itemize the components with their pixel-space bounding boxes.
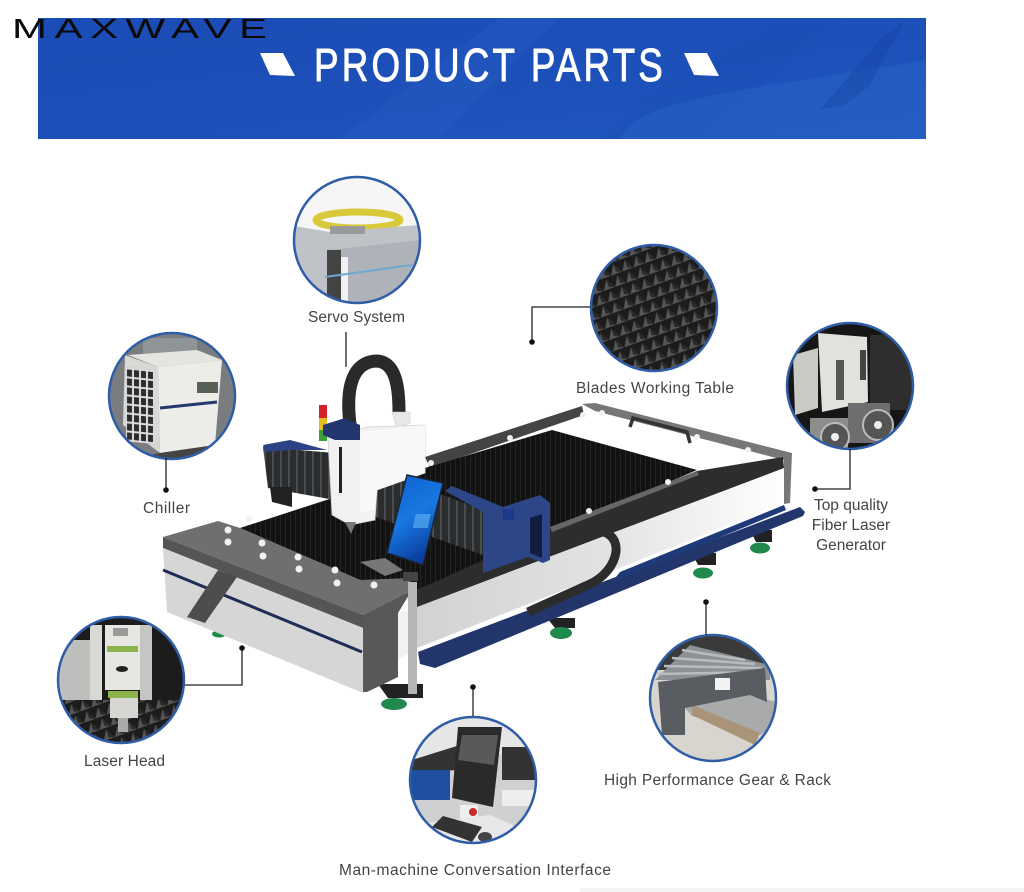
logo: MAXWAVE [12,13,267,44]
callout: fiber laser generator [787,323,915,554]
label: Servo System [308,309,405,326]
cutting bed [240,430,697,590]
label [812,497,890,554]
callout: gear and rack [604,599,831,789]
label: Fiber Laser [812,517,890,534]
gantry blue end [445,486,550,573]
callout: laser head [58,617,245,770]
label: Laser Head [84,753,165,770]
front end top [163,521,412,615]
signal light [319,405,327,441]
blades photo [591,245,717,371]
label: High Performance Gear & Rack [604,772,831,789]
bottom edge shade [580,888,1024,892]
label: Chiller [143,500,190,517]
gear photo [650,635,776,761]
laser cutting machine [163,361,805,710]
callout: chiller [109,333,235,517]
cutting head [323,412,425,534]
front face [163,548,363,693]
rear bed and frame [425,403,792,504]
leader [163,458,169,493]
label: Man-machine Conversation Interface [339,862,611,879]
control post [360,558,418,694]
mounting bumps [224,410,751,588]
gantry right bellows [370,476,483,555]
machine feet [212,530,772,710]
side toothed band [417,457,784,607]
laser head photo [58,617,184,743]
gantry left bellows [263,440,335,507]
drag chain [349,361,399,424]
leader [185,645,245,685]
chiller photo [109,333,235,459]
generator photo [787,323,915,451]
front end side [363,590,412,692]
touch screen [387,475,443,565]
cable chain lower [528,532,616,612]
base rail [418,507,805,668]
leader [703,599,709,635]
label: Generator [816,537,886,554]
callout: man-machine interface [339,684,611,879]
leader [345,332,347,367]
servo photo [294,177,420,303]
callout: blades working table [529,245,734,397]
banner [38,18,926,139]
side panel [417,468,785,648]
label: Top quality [814,497,888,514]
leader [470,684,476,716]
callout: servo system [294,177,420,367]
label: Blades Working Table [576,380,734,397]
interface photo [410,717,536,843]
leader [529,307,590,345]
banner title: PRODUCT PARTS [314,39,663,91]
leader [812,449,850,492]
